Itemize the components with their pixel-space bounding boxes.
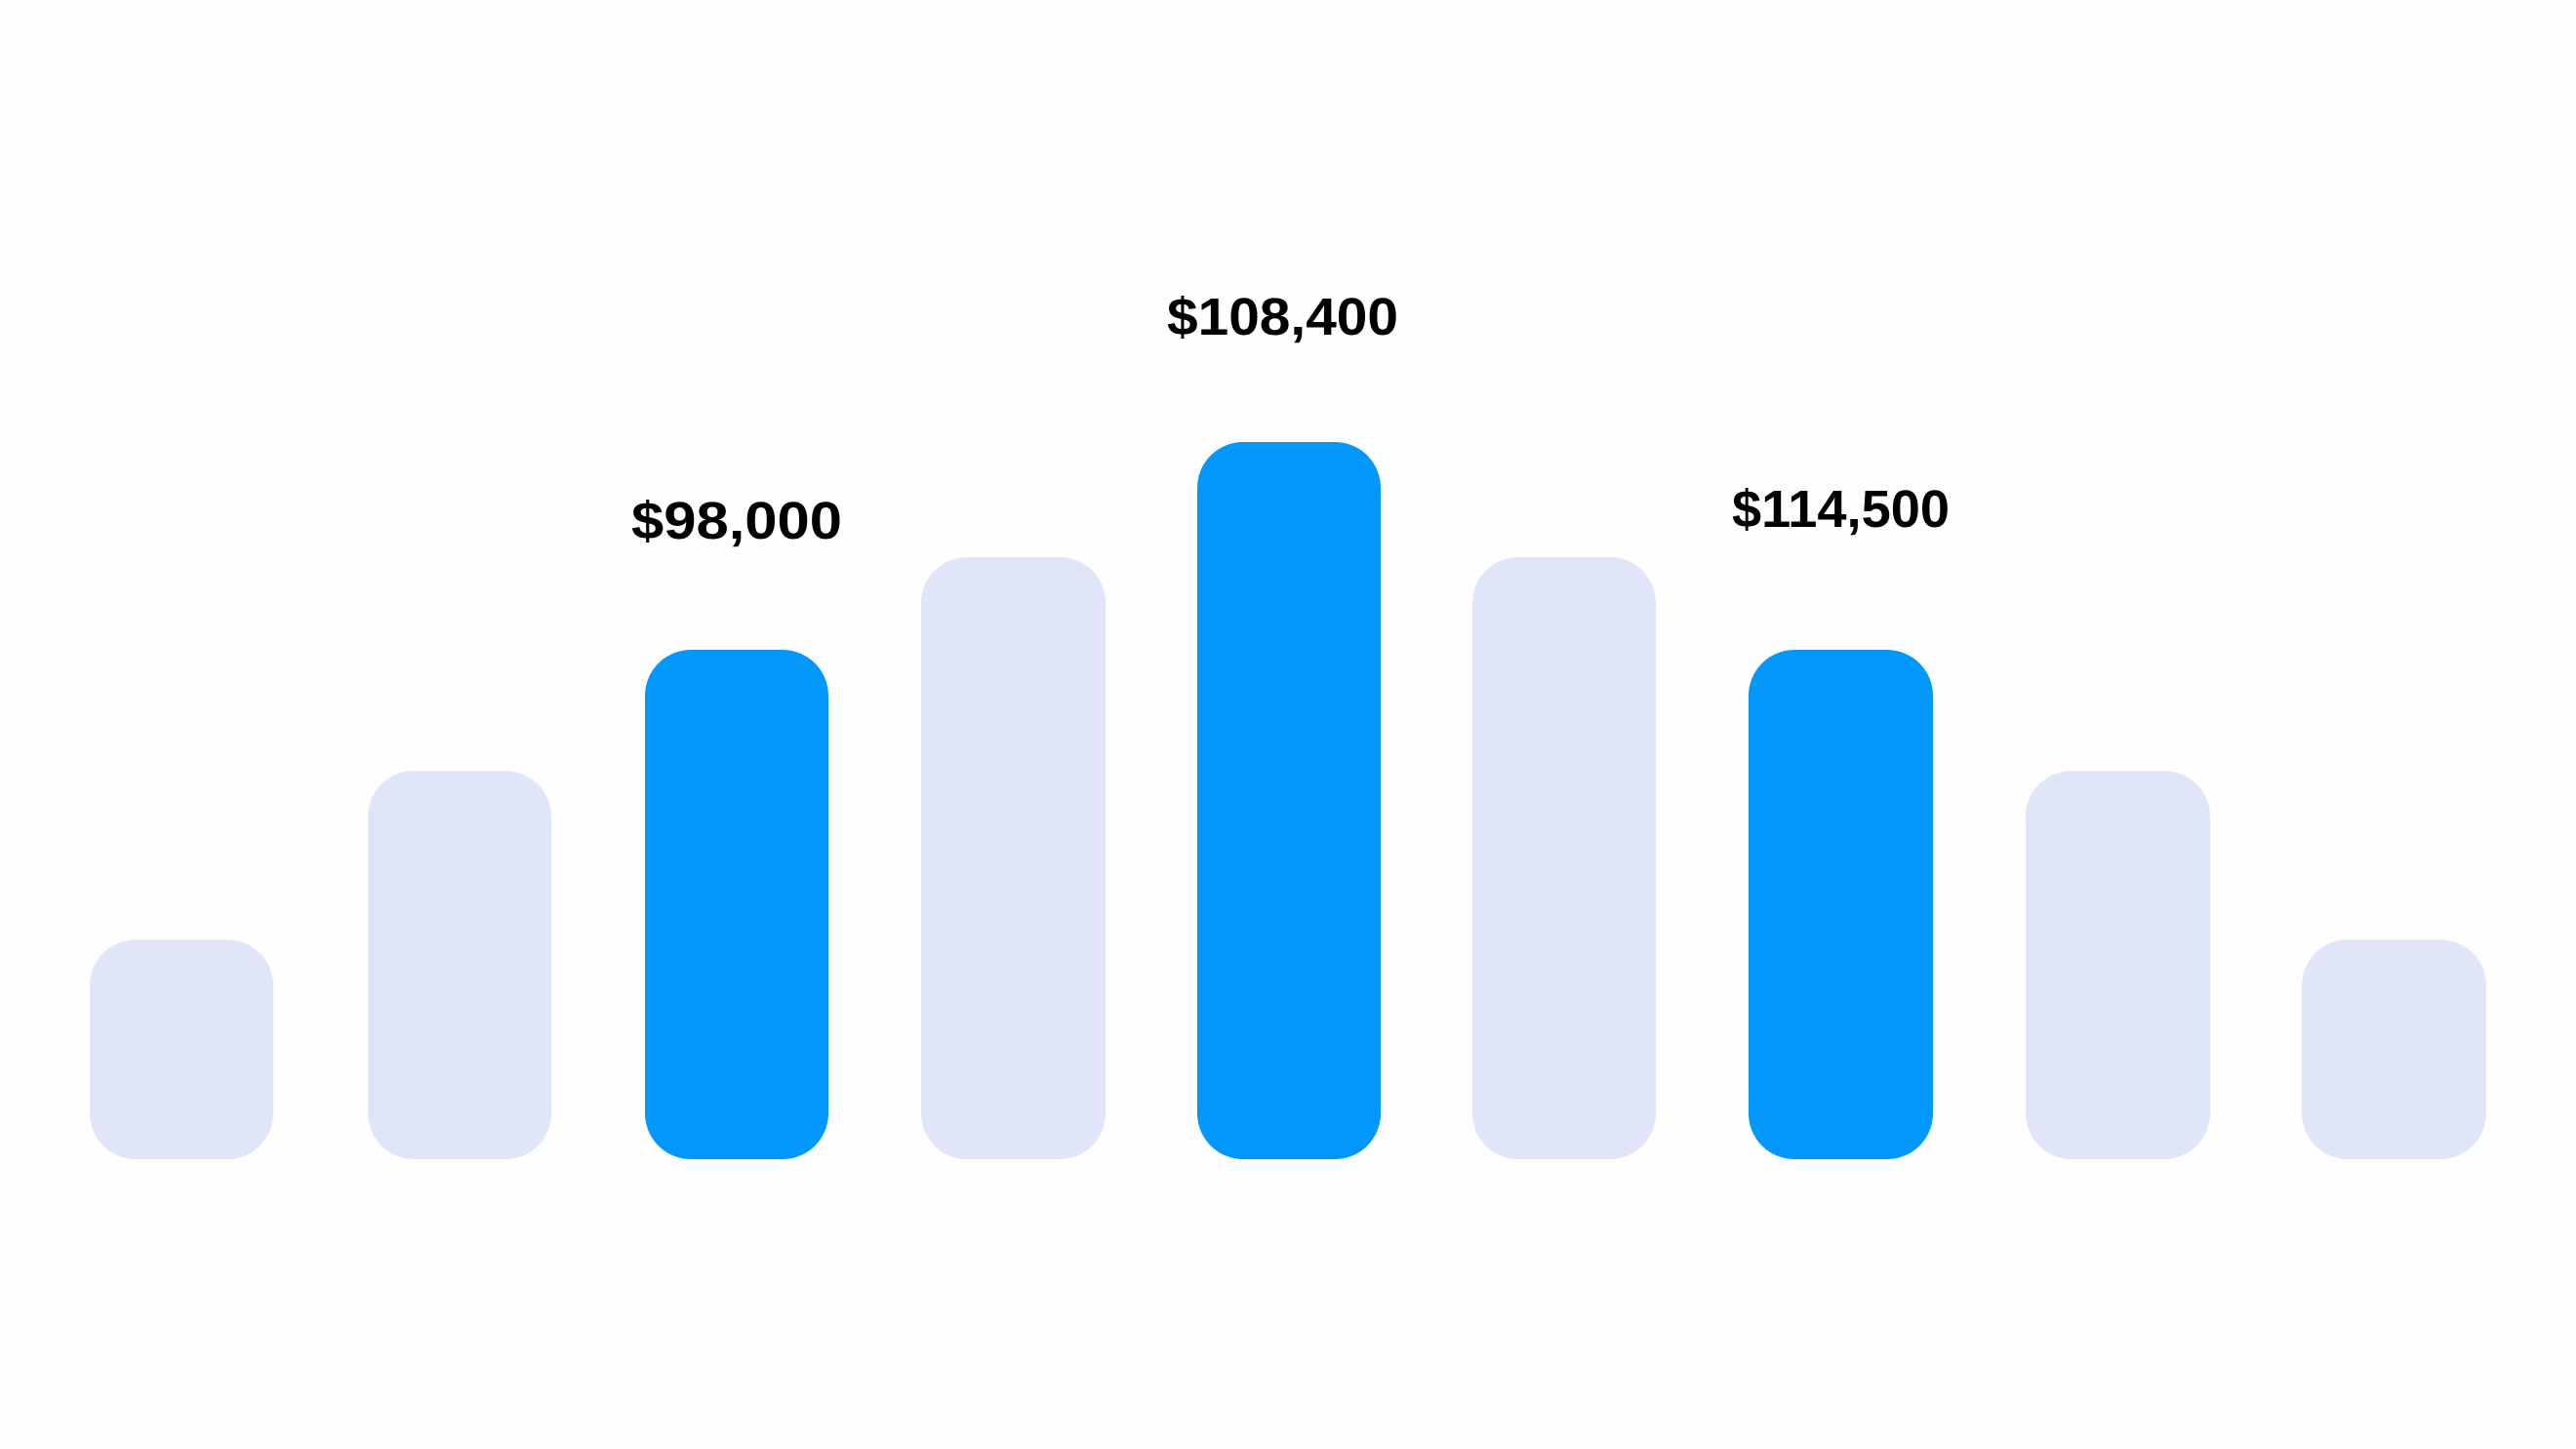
bar 2 bbox=[368, 771, 551, 1159]
bar 8 bbox=[2026, 771, 2210, 1159]
bar 6 bbox=[1472, 557, 1656, 1159]
value label: $114,500: $114,500 bbox=[1732, 480, 1950, 539]
bar 1 bbox=[90, 940, 273, 1159]
bar 7: highlighted bbox=[1749, 650, 1933, 1159]
bar 3: highlighted bbox=[645, 650, 828, 1159]
value label: $98,000: $98,000 bbox=[631, 492, 842, 550]
bar 4 bbox=[921, 557, 1106, 1159]
value label: $108,400: $108,400 bbox=[1167, 288, 1398, 346]
bar 9 bbox=[2302, 940, 2486, 1159]
bar 5: highlighted bbox=[1197, 442, 1381, 1159]
